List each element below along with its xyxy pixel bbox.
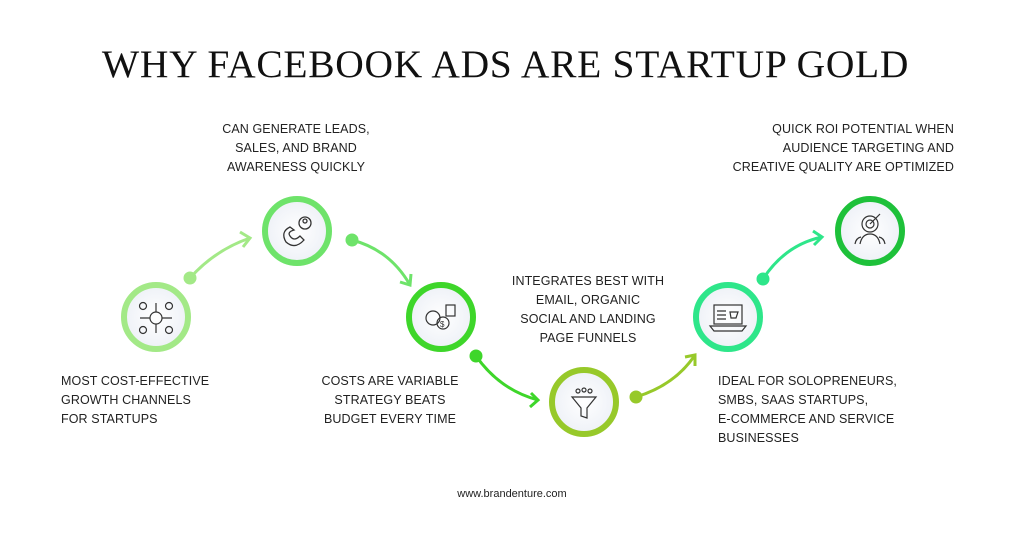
text: integrates (512, 274, 664, 345)
text: ideal: SMBS, SAAS STARTUPS, (718, 393, 868, 407)
text: cost effective (61, 374, 209, 426)
circle 5: laptop cart (696, 285, 760, 349)
text: roi (733, 122, 954, 174)
text: roi: QUICK ROI POTENTIAL WHEN (772, 122, 954, 136)
text: costs variable: STRATEGY BEATS (334, 393, 446, 407)
footer url: www.brandenture.com (457, 488, 567, 500)
text: costs variable (321, 374, 459, 426)
arrow 2 (347, 235, 411, 285)
arrow 5 (758, 231, 822, 284)
text: cost effective: MOST COST-EFFECTIVE (61, 374, 209, 388)
text: leads: AWARENESS QUICKLY (227, 160, 365, 174)
text: integrates: PAGE FUNNELS (540, 331, 636, 345)
text: leads (222, 122, 370, 174)
circle 3: money gear: $ (440, 320, 445, 329)
text: roi: CREATIVE QUALITY ARE OPTIMIZED (733, 160, 954, 174)
title: WHY FACEBOOK ADS ARE STARTUP GOLD (102, 42, 909, 86)
circle 1: network (124, 285, 188, 349)
circle 3: money gear (409, 285, 473, 349)
circle 2: magnet (265, 199, 329, 263)
text: integrates: EMAIL, ORGANIC (536, 293, 640, 307)
circle 4: funnel (552, 370, 616, 434)
text: leads: CAN GENERATE LEADS, (222, 122, 370, 136)
circle 6: target audience (838, 199, 902, 263)
text: costs variable: COSTS ARE VARIABLE (321, 374, 459, 388)
text: leads: SALES, AND BRAND (235, 141, 357, 155)
text: integrates: SOCIAL AND LANDING (520, 312, 656, 326)
arrow 3 (471, 351, 538, 407)
arrow 4 (631, 355, 695, 402)
text: integrates: INTEGRATES BEST WITH (512, 274, 664, 288)
text: cost effective: GROWTH CHANNELS (61, 393, 191, 407)
arrow 1 (185, 232, 250, 283)
text: costs variable: BUDGET EVERY TIME (324, 412, 456, 426)
text: ideal: E-COMMERCE AND SERVICE (718, 412, 894, 426)
text: cost effective: FOR STARTUPS (61, 412, 158, 426)
text: ideal: IDEAL FOR SOLOPRENEURS, (718, 374, 897, 388)
text: ideal (718, 374, 897, 445)
text: roi: AUDIENCE TARGETING AND (783, 141, 954, 155)
text: ideal: BUSINESSES (718, 431, 799, 445)
